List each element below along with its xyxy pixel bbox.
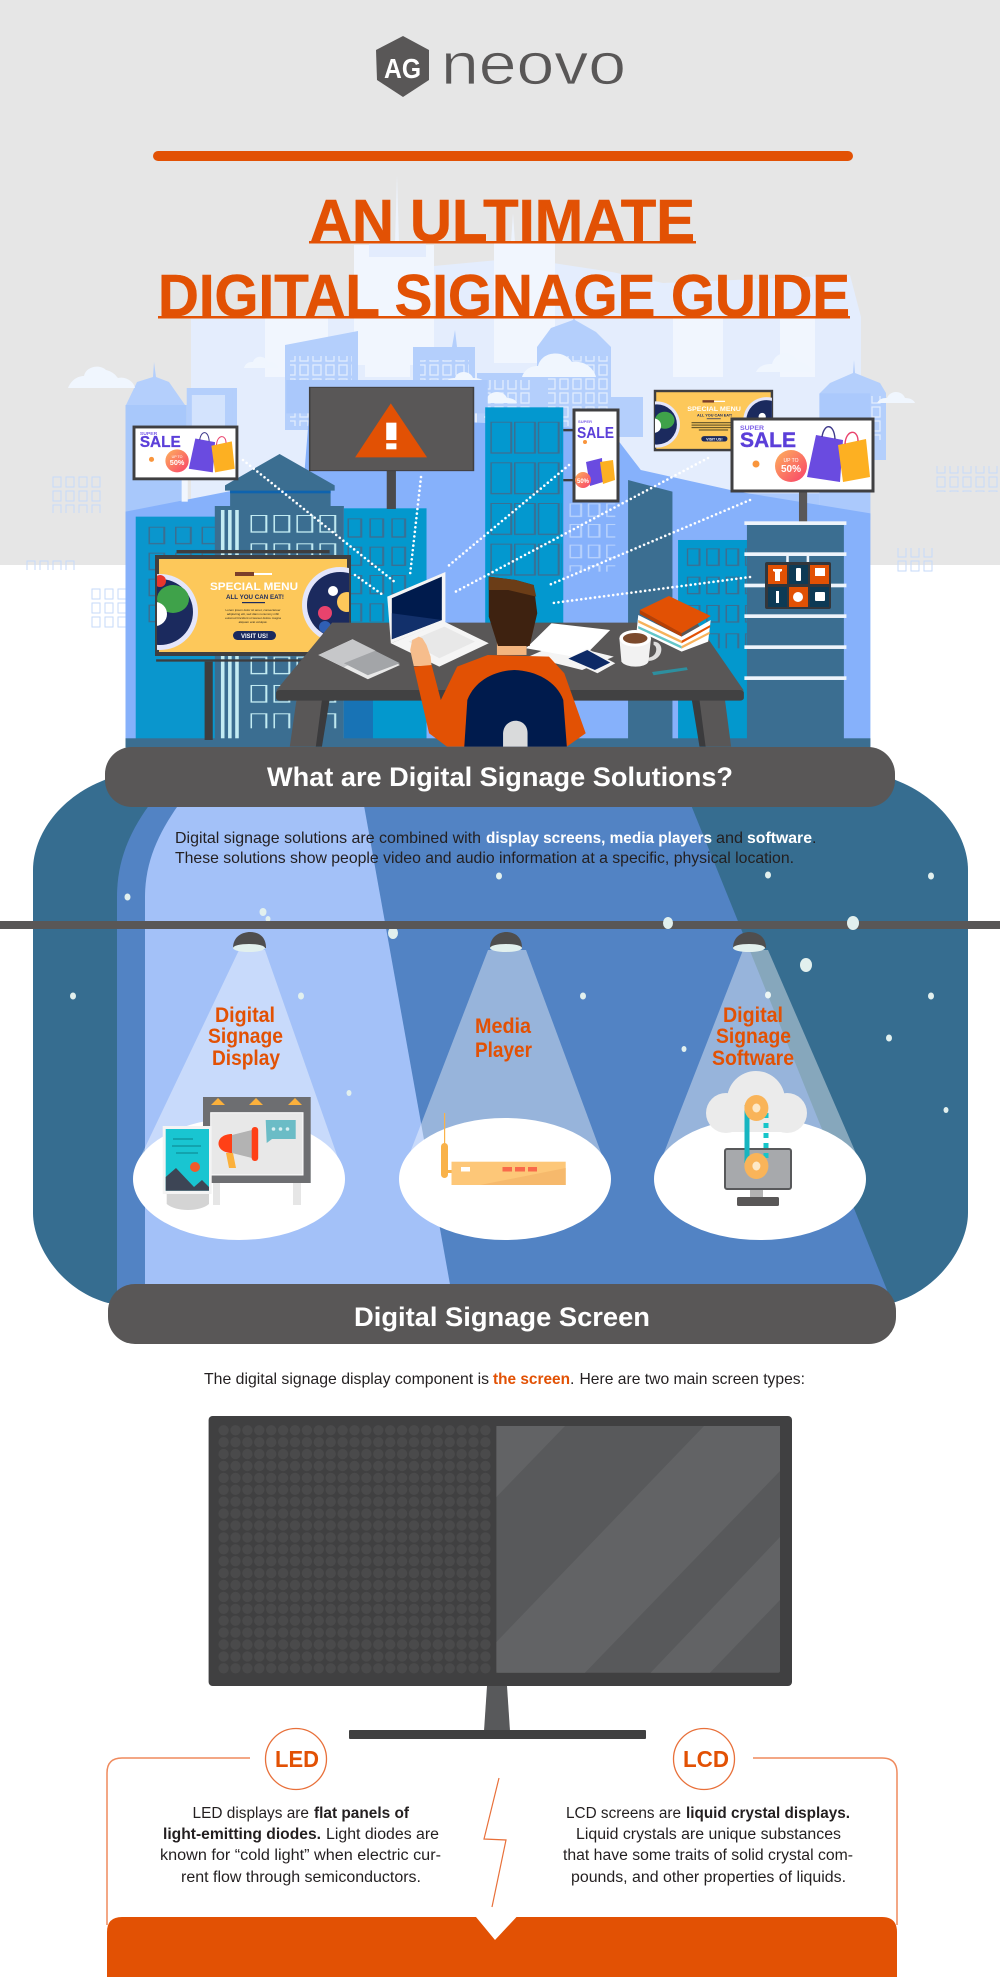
- big menu board: ALL YOU CAN EAT!: [226, 595, 284, 601]
- desk with items and person: [276, 572, 744, 747]
- small sale board: SUPER: [140, 431, 158, 436]
- white ellipse 2: [399, 1118, 611, 1240]
- big billboard rails and pole: [156, 550, 330, 740]
- intro text: software: [747, 830, 812, 847]
- big menu board: aliquam erat volutpat.: [239, 620, 268, 624]
- title: [158, 188, 850, 329]
- phone board arms: [563, 429, 573, 481]
- outline box: [107, 1758, 897, 1925]
- top menu board: ALL YOU CAN EAT!: [697, 414, 732, 418]
- laptop: [387, 572, 489, 667]
- LCD badge: LCD: [683, 1746, 729, 1772]
- label: media player: Player: [475, 1039, 532, 1062]
- lamp 1: [233, 932, 266, 952]
- big menu board: [155, 555, 351, 656]
- panel background: teal blob: [33, 778, 968, 1303]
- big sale board: SUPER: [740, 426, 765, 432]
- LED dot matrix: [218, 1425, 491, 1674]
- wordmark: neovo: neovo: [441, 32, 626, 97]
- intro text: [175, 830, 816, 867]
- LED description: [160, 1805, 441, 1886]
- screen intro text: .: [570, 1371, 574, 1388]
- building: tall blue: [485, 407, 563, 747]
- building: left blue: [136, 517, 228, 747]
- phone-shaped sale board: 50%: [577, 479, 590, 485]
- beam 3: [662, 950, 858, 1158]
- label: digital signage display: Digital: [215, 1004, 275, 1027]
- title: AN ULTIMATE: [310, 188, 695, 254]
- LCD description: Liquid crystals are unique substances: [576, 1826, 841, 1843]
- books: [637, 596, 711, 652]
- white ellipse 1: [133, 1118, 345, 1240]
- dotted connection lines: [243, 458, 750, 603]
- top menu board: SPECIAL MENU: [687, 406, 741, 413]
- big menu board: VISIT US!: [241, 634, 268, 640]
- icon panel on right tower: [765, 562, 831, 609]
- LCD description: liquid crystal displays.: [686, 1805, 850, 1822]
- spotlight: light blue: [145, 800, 451, 1290]
- snow dots: [70, 872, 948, 1113]
- icon: media player router: [441, 1113, 566, 1185]
- street base: [126, 738, 870, 748]
- title: DIGITAL SIGNAGE GUIDE: [158, 263, 850, 329]
- label: digital signage software: Signage: [716, 1025, 791, 1048]
- screen intro text: [204, 1371, 805, 1388]
- beam 1: [140, 950, 338, 1158]
- monitor neck: [484, 1686, 510, 1731]
- billboard pole: right: [799, 490, 807, 522]
- background: grey header band: [0, 0, 1000, 565]
- heading pill: what are digital signage solutions: What are Digital Signage Solutions?: [267, 762, 733, 792]
- mid blue backdrop buildings: [126, 380, 870, 747]
- intro text: and: [716, 830, 743, 847]
- LCD description: pounds, and other properties of liquids.: [571, 1869, 846, 1886]
- screen intro text: Here are two main screen types:: [580, 1371, 805, 1388]
- panel: LED vs LCD: [107, 1728, 897, 1977]
- intro text: These solutions show people video and audio information at a specific, physical location.: [175, 850, 794, 867]
- monitor frame: [209, 1416, 792, 1686]
- LED description: rent flow through semiconductors.: [181, 1869, 421, 1886]
- phone-shaped sale board: SUPER: [578, 419, 592, 424]
- intro text: display screens, media players: [486, 830, 712, 847]
- illustration: city scene: [126, 380, 870, 748]
- phone-shaped sale board: SALE: [577, 425, 614, 442]
- LCD description: [563, 1805, 853, 1886]
- LED description: LED displays are: [192, 1805, 309, 1822]
- LED description: flat panels of: [314, 1805, 410, 1822]
- heading pill: digital signage screen: Digital Signage Screen: [354, 1302, 650, 1332]
- big sale board: SALE: [740, 429, 796, 452]
- warning screen: [310, 387, 473, 509]
- spotlight: blue: [117, 800, 891, 1300]
- top menu board: VISIT US!: [706, 437, 723, 441]
- big sale board: [732, 419, 873, 491]
- icon: display billboard and banner: [163, 1097, 311, 1210]
- intro text: .: [812, 830, 816, 847]
- pencil: [652, 667, 688, 675]
- LED description: light-emitting diodes.: [163, 1826, 321, 1843]
- building: right shelving tower: [744, 521, 846, 747]
- orange footer block with notch: [107, 1917, 897, 1977]
- small sale board: SALE: [140, 434, 181, 451]
- big menu board: adipiscing elit, sed diam nonummy nibh: [227, 612, 280, 616]
- notebook: [318, 639, 400, 679]
- LCD description: LCD screens are: [566, 1805, 681, 1822]
- big menu board: SPECIAL MENU: [210, 581, 298, 593]
- phone: [567, 649, 615, 673]
- building: dark tower with roof: [215, 454, 344, 747]
- icon: AG shield: AG: [384, 53, 421, 84]
- screen intro text: the screen: [493, 1371, 570, 1388]
- label: digital signage display: Display: [212, 1047, 280, 1070]
- label: media player: [475, 1015, 532, 1062]
- logo: [376, 32, 626, 97]
- big menu board: euismod tincidunt ut laoreet dolore magna: [225, 616, 281, 620]
- label: digital signage software: Digital: [723, 1004, 783, 1027]
- big sale board: 50%: [781, 464, 801, 475]
- heading pill: digital signage screen: [108, 1284, 896, 1344]
- monitor base: [349, 1730, 646, 1739]
- building: right blue: [678, 540, 748, 747]
- lightning divider: [484, 1778, 506, 1907]
- label: digital signage display: Signage: [208, 1025, 283, 1048]
- intro text: Digital signage solutions are combined with: [175, 830, 481, 847]
- phone-shaped sale board: [574, 410, 618, 501]
- LED description: known for “cold light” when electric cur-: [160, 1847, 441, 1864]
- LED badge: LED: [275, 1746, 319, 1772]
- light blue distant buildings: [126, 317, 886, 460]
- LED description: Light diodes are: [326, 1826, 439, 1843]
- label: digital signage software: [712, 1004, 794, 1070]
- LCD badge: [674, 1728, 734, 1790]
- icon: AG shield: [376, 36, 429, 97]
- LED badge: [266, 1728, 326, 1790]
- icon: cloud software: [706, 1071, 807, 1206]
- pale city skyline behind the title: [191, 175, 861, 620]
- papers: [526, 623, 614, 670]
- monitor: LED and LCD comparison: [209, 1416, 792, 1739]
- LCD panel: [496, 1426, 780, 1673]
- desk: [276, 623, 744, 747]
- outer window grids: [26, 466, 998, 628]
- small sale board: UP TO: [172, 455, 183, 459]
- screen intro text: The digital signage display component is: [204, 1371, 489, 1388]
- label: digital signage display: [208, 1004, 283, 1070]
- LCD description: that have some traits of solid crystal com-: [563, 1847, 853, 1864]
- orange rule: [153, 151, 853, 161]
- label: digital signage software: Software: [712, 1047, 794, 1070]
- big menu board: Lorem ipsum dolor sit amet, consectetuer: [225, 608, 281, 612]
- small sale board: 50%: [170, 458, 185, 467]
- building: dark slanted: [628, 480, 672, 747]
- label: media player: Media: [475, 1015, 531, 1038]
- bar highlights: [663, 916, 859, 930]
- beam 2: [408, 950, 603, 1158]
- white ellipse 3: [654, 1118, 866, 1240]
- coffee cup: [619, 630, 659, 667]
- small sale board: [134, 427, 237, 479]
- hanging bar: [0, 921, 1000, 929]
- lamp 3: [733, 932, 766, 952]
- top menu board: [654, 390, 774, 452]
- clouds: [68, 353, 915, 403]
- building: mid blue: [344, 508, 427, 747]
- lamp 2: [490, 932, 522, 952]
- heading pill: what are digital signage solutions: [105, 747, 895, 807]
- big sale board: UP TO: [783, 458, 799, 464]
- panel: what are digital signage solutions: [0, 778, 1000, 1303]
- person: [410, 577, 586, 747]
